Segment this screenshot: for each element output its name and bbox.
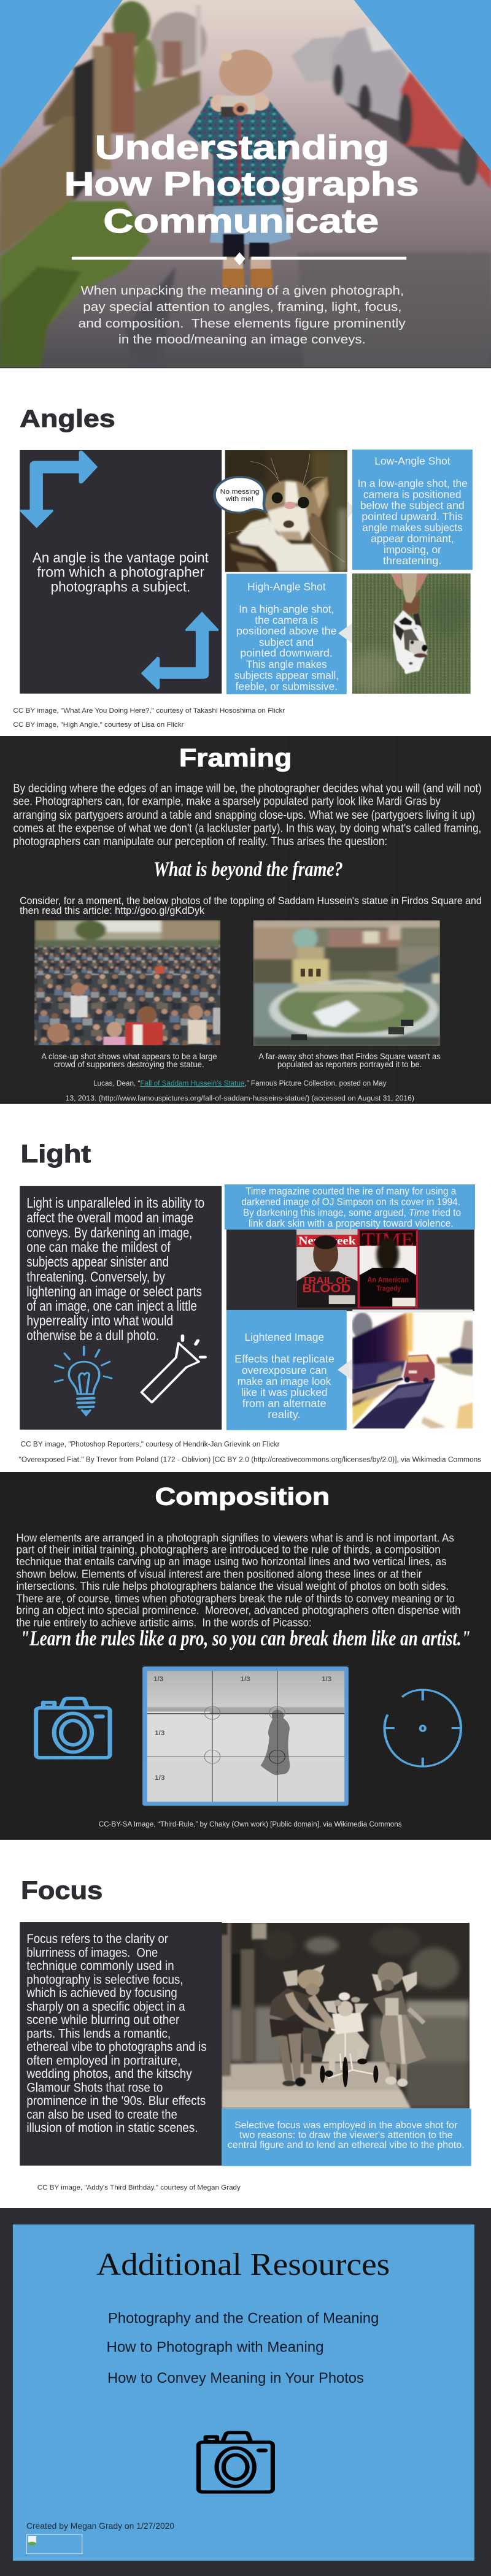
icon: light bulb — [55, 1347, 112, 1415]
light body text: lightening an image or select parts — [26, 1284, 202, 1300]
script subheading: What is beyond the frame? — [153, 858, 343, 881]
photo: rule of thirds: 1/3 — [155, 1729, 164, 1737]
cover: time: An American — [367, 1276, 409, 1284]
callout: lightened image: from an alternate — [242, 1398, 327, 1409]
panel text: photographs a subject. — [51, 579, 190, 595]
hero title: Communicate — [103, 202, 379, 240]
heading: angles: Angles — [20, 405, 115, 432]
image credit: CC BY image, "Addy's Third Birthday," courtesy of Megan Grady — [37, 2183, 241, 2191]
callout: high-angle shot: This angle makes — [246, 659, 327, 670]
callout: high-angle shot: the camera is — [255, 615, 318, 626]
panel: focus description: often employed in portraiture, — [26, 2053, 180, 2068]
panel: hero — [0, 0, 491, 368]
light body text: Light is unparalleled in its ability to — [26, 1195, 204, 1211]
speech bubble: with me! — [225, 494, 253, 502]
composition body text — [17, 1532, 461, 1629]
light body text: conveys. By darkening an image, — [26, 1225, 192, 1241]
icon: flashlight — [142, 1336, 205, 1403]
cover: time: TIME — [361, 1229, 414, 1250]
callout: high-angle shot: positioned above the — [236, 626, 336, 637]
light body text: of an image, one can inject a little — [26, 1298, 197, 1314]
image credits: CC BY image, "Photoshop Reporters," courtesy of Hendrik-Jan Grievink on Flickr — [21, 1439, 280, 1448]
icon: camera — [36, 1698, 110, 1758]
image credits: CC BY image, "What Are You Doing Here?," courtesy of Takashi Hososhima on Flickr — [13, 706, 285, 714]
section: focus — [20, 1877, 471, 2191]
callout: lightened image: overexposure can — [242, 1364, 327, 1376]
panel: magazine covers — [226, 1229, 474, 1311]
heading: composition: Composition — [155, 1483, 330, 1510]
hero intro text: When unpacking the meaning of a given photograph, — [81, 284, 404, 298]
section: light — [19, 1140, 481, 1463]
callout: lightened image: reality. — [268, 1408, 301, 1420]
light body text: hyperreality into what would — [26, 1313, 173, 1328]
light body text: subjects appear sinister and — [26, 1254, 169, 1270]
panel: focus description: illusion of motion in static scenes. — [26, 2120, 198, 2135]
resource links: How to Convey Meaning in Your Photos — [107, 2370, 364, 2386]
panel: focus description: which is achieved by focusing — [26, 1985, 177, 2000]
callout: high-angle shot: In a high-angle shot, — [239, 604, 334, 615]
callout: low-angle shot: threatening. — [383, 555, 441, 567]
callout: low-angle shot: appear dominant, — [371, 533, 454, 545]
section: angles — [13, 405, 473, 728]
callout: lightened image: Effects that replicate — [234, 1353, 334, 1365]
light body text: one can make the mildest of — [26, 1239, 171, 1255]
photo: overexposed fiat — [352, 1313, 473, 1428]
hero intro text: in the mood/meaning an image conveys. — [118, 333, 366, 347]
instruction text: then read this article: http://goo.gl/gKdDyk — [20, 905, 205, 916]
light body text: otherwise be a dull photo. — [26, 1327, 159, 1343]
photo: rule of thirds: 1/3 — [240, 1674, 250, 1682]
callout: high-angle shot: subject and — [259, 637, 314, 648]
photo: far-away square — [253, 921, 440, 1046]
instruction text — [20, 895, 482, 916]
panel: angle definition — [20, 450, 222, 694]
hero intro text: and composition. These elements figure prominently — [79, 316, 406, 331]
panel: focus description: Focus refers to the clarity or — [26, 1931, 168, 1946]
photo: selective focus children — [222, 1923, 470, 2109]
image credits — [19, 1439, 481, 1463]
panel: focus description: can also be used to create the — [26, 2107, 177, 2122]
photo: rule of thirds: 1/3 — [322, 1674, 331, 1682]
caption: selective focus — [222, 2109, 471, 2166]
photo: rule of thirds — [142, 1666, 349, 1806]
callout: high-angle shot: pointed downward. — [240, 648, 333, 659]
hero title: Understanding — [95, 129, 389, 166]
icon: arrow up-left — [20, 451, 98, 528]
source citation — [66, 1079, 414, 1102]
cover: time: Tragedy — [376, 1284, 401, 1292]
caption: close-up — [41, 1052, 217, 1070]
hero title: How Photographs — [64, 166, 419, 202]
panel: focus description: blurriness of images. One — [26, 1945, 158, 1960]
hero intro text: pay special attention to angles, framing, light, focus, — [83, 301, 402, 314]
heading: light: Light — [21, 1140, 91, 1168]
light body text: threatening. Conversely, by — [26, 1268, 165, 1284]
heading: framing: Framing — [179, 744, 292, 772]
photo: rule of thirds: 1/3 — [153, 1674, 163, 1682]
callout: high-angle shot: High-Angle Shot — [247, 581, 326, 593]
callout: time magazine: By darkening this image, some argued, Time tried to — [243, 1207, 461, 1219]
panel: focus description: Glamour Shots that rose to — [26, 2080, 163, 2095]
hero title — [64, 129, 419, 240]
panel: focus description: technique commonly used in — [26, 1958, 174, 1973]
cover: newsweek: TRAIL OF — [302, 1275, 350, 1286]
panel: focus description: ethereal vibe to photographs and is — [26, 2039, 207, 2054]
callout: lightened image: like it was plucked — [241, 1386, 328, 1398]
callout: low-angle shot: Low-Angle Shot — [374, 456, 450, 467]
light body text — [26, 1195, 204, 1343]
caption: close-up: A close-up shot shows what appears to be a large — [41, 1052, 217, 1062]
broken image placeholder — [26, 2534, 82, 2554]
panel text: An angle is the vantage point — [33, 550, 209, 565]
resource links: Photography and the Creation of Meaning — [108, 2310, 379, 2326]
creator credit: Created by Megan Grady on 1/27/2020 — [26, 2521, 174, 2531]
callout: lightened image: Lightened Image — [244, 1332, 324, 1343]
caption: far-away: populated as reporters portrayed it to be. — [277, 1060, 422, 1070]
hero photo: child with camera — [0, 0, 491, 367]
callout: lightened image: make an image look — [238, 1376, 331, 1387]
cover: newsweek: Newsweek — [298, 1233, 356, 1247]
photo: rule of thirds: 1/3 — [155, 1774, 164, 1782]
icon: camera — [198, 2432, 273, 2492]
framing body text — [13, 781, 482, 848]
panel: focus description: sharply on a specific object in a — [26, 1999, 185, 2014]
heading: additional resources: Additional Resources — [96, 2247, 390, 2282]
composition body text: the rule entirely to achieve artistic aims. In the words of Picasso: — [17, 1617, 312, 1629]
cover: newsweek — [296, 1229, 358, 1308]
callout: time magazine — [225, 1184, 475, 1230]
icon: arrow down-right — [141, 611, 218, 689]
caption: close-up: crowd of supporters destroying the statue. — [54, 1060, 204, 1070]
section: framing — [0, 736, 491, 1104]
heading: focus: Focus — [21, 1877, 102, 1904]
caption: far-away — [258, 1052, 441, 1070]
section: additional resources — [0, 2208, 491, 2576]
cover: newsweek: BLOOD — [302, 1282, 350, 1295]
light body text: affect the overall mood an image — [26, 1209, 193, 1225]
panel: focus description: photography is selective focus, — [26, 1972, 183, 1987]
speech bubble — [214, 477, 266, 513]
callout: high-angle shot: subjects appear small, — [234, 670, 339, 681]
panel: focus description: scene while blurring out other — [26, 2012, 179, 2027]
section: composition — [0, 1472, 491, 1840]
photo: dog high angle — [350, 573, 471, 695]
image credits: CC BY image, "High Angle," courtesy of Lisa on Flickr — [13, 720, 184, 728]
callout: lightened image — [226, 1310, 352, 1430]
photo: crowd close-up — [34, 920, 221, 1046]
cover: time — [358, 1229, 418, 1308]
icon: focus target — [385, 1690, 462, 1767]
panel: light description — [20, 1186, 222, 1430]
hero divider — [72, 252, 406, 266]
callout: low-angle shot: imposing, or — [384, 544, 441, 556]
hero intro text — [79, 284, 406, 347]
source citation: Lucas, Dean, “Fall of Saddam Hussein's Statue,” Famous Picture Collection, posted on May — [93, 1079, 387, 1087]
panel: focus description: prominence in the '90s. Blur effects — [26, 2093, 206, 2108]
panel: focus description: wedding photos, and the kitschy — [26, 2066, 192, 2081]
resource links: How to Photograph with Meaning — [106, 2339, 324, 2356]
photo: kitten low angle — [225, 450, 347, 572]
callout: high-angle shot — [226, 574, 352, 694]
callout: high-angle shot: feeble, or submissive. — [236, 681, 338, 692]
speech bubble: No messing — [220, 487, 259, 495]
resource links — [106, 2310, 379, 2386]
callout: low-angle shot — [347, 450, 473, 570]
panel: focus description — [20, 1922, 222, 2166]
panel text: from which a photographer — [37, 564, 204, 580]
panel: focus description: parts. This lends a romantic, — [26, 2026, 171, 2041]
panel text — [33, 550, 209, 595]
image credits — [13, 706, 285, 728]
strip above fiat photo — [352, 1309, 473, 1313]
